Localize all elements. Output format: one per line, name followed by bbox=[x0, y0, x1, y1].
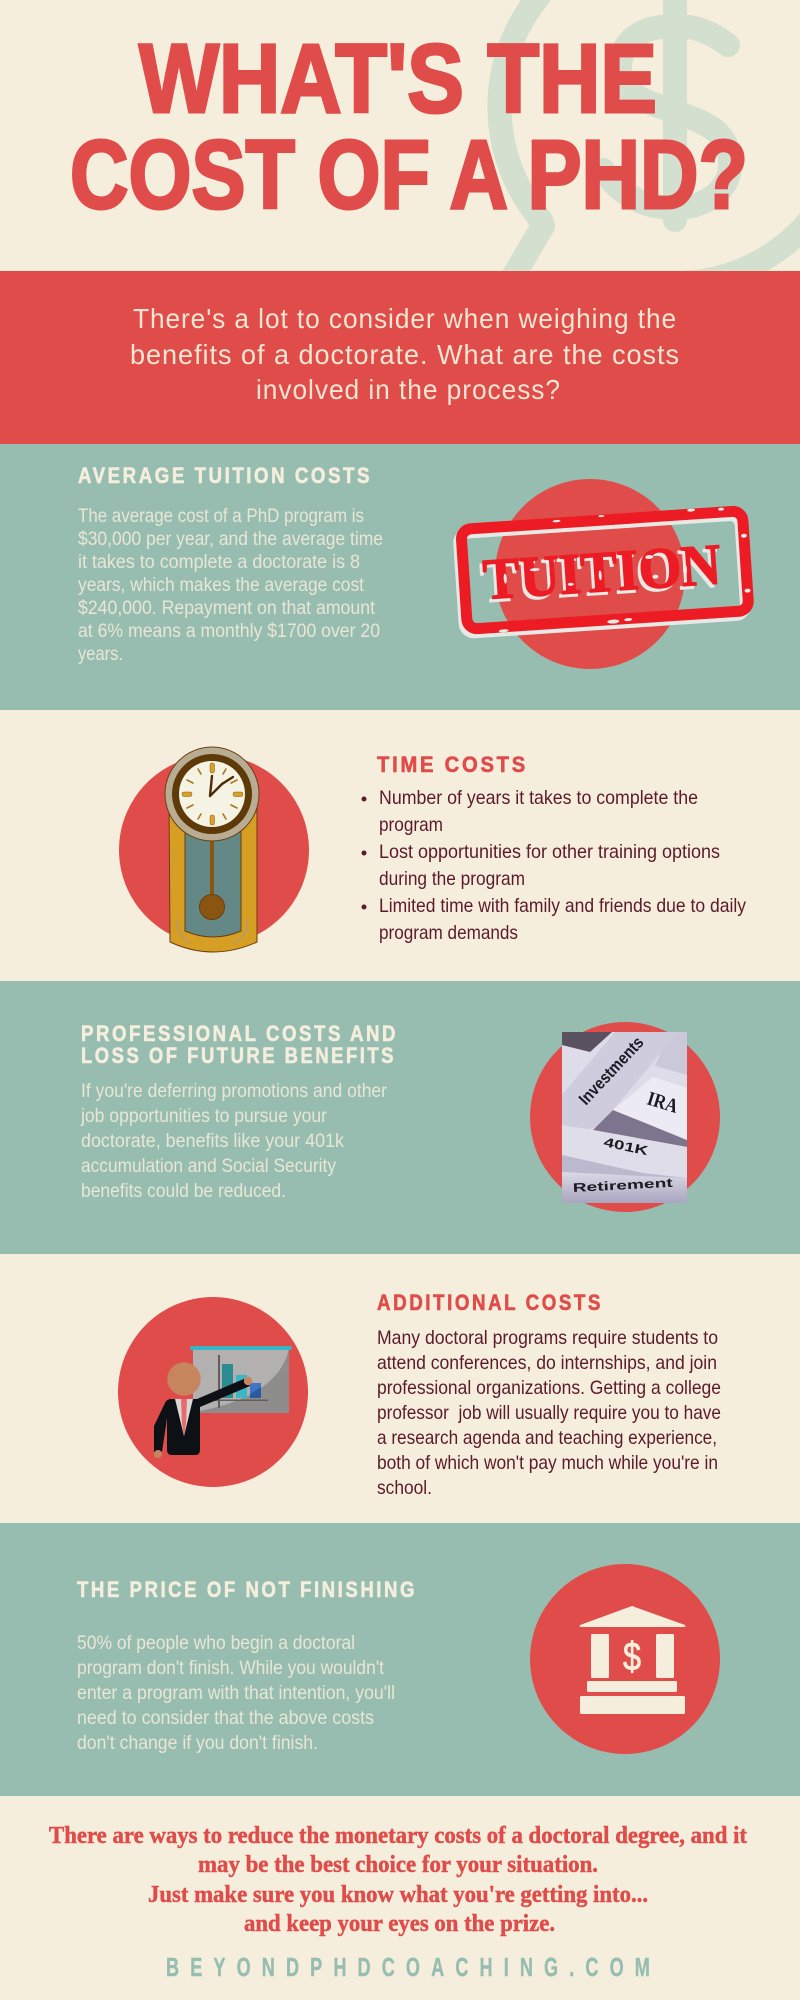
title bbox=[70, 24, 748, 229]
text: additional body: Many doctoral programs require students to bbox=[377, 1327, 718, 1349]
list: time costs bullets: Limited time with family and friends due to daily bbox=[379, 895, 746, 917]
panel: average tuition costs bbox=[0, 444, 800, 710]
text: not finishing body bbox=[77, 1633, 395, 1754]
text: closing statement: Just make sure you know what you're getting into... bbox=[148, 1882, 648, 1908]
text: professional body bbox=[80, 1081, 388, 1202]
panel: professional costs bbox=[0, 981, 800, 1254]
panel: intro banner: involved in the process? bbox=[256, 374, 561, 405]
panel: time costs bbox=[0, 710, 800, 981]
icon: tuition stamp on red circle bbox=[458, 479, 752, 669]
text: not finishing body: don't change if you don't finish. bbox=[77, 1733, 318, 1754]
text: professional body: benefits could be reduced. bbox=[81, 1181, 286, 1202]
list: time costs bullets: program demands bbox=[379, 922, 518, 944]
text: tuition body bbox=[78, 506, 383, 665]
text: closing statement: may be the best choice for your situation. bbox=[198, 1852, 598, 1878]
text: not finishing body: 50% of people who begin a doctoral bbox=[77, 1633, 355, 1654]
text: tuition body: years, which makes the average cost bbox=[78, 575, 365, 596]
list: time costs bullets: Lost opportunities for other training options bbox=[379, 841, 720, 863]
text: closing statement bbox=[49, 1823, 747, 1937]
heading: additional costs: ADDITIONAL COSTS bbox=[377, 1290, 603, 1315]
icon: retirement photo on red circle: Investments bbox=[575, 1033, 648, 1109]
panel: intro banner: There's a lot to consider when weighing the bbox=[133, 303, 677, 334]
text: professional body: accumulation and Social Security bbox=[81, 1156, 336, 1177]
text: professional body: doctorate, benefits like your 401k bbox=[81, 1131, 344, 1152]
text: tuition body: years. bbox=[78, 644, 123, 665]
icon: tuition stamp on red circle: TUITION bbox=[478, 535, 720, 615]
panel: intro banner: benefits of a doctorate. What are the costs bbox=[130, 339, 680, 370]
list: time costs bullets: during the program bbox=[379, 868, 525, 890]
icon: retirement photo on red circle: Retirement bbox=[572, 1176, 674, 1195]
text: tuition body: The average cost of a PhD program is bbox=[78, 506, 364, 527]
list: time costs bullets bbox=[362, 787, 746, 944]
icon: retirement photo on red circle: 401K bbox=[602, 1134, 650, 1158]
heading: professional costs: PROFESSIONAL COSTS AND bbox=[81, 1021, 398, 1046]
text: additional body: professor job will usually require you to have bbox=[377, 1402, 721, 1424]
icon: background dollar with circular arrow bbox=[499, 0, 800, 290]
icon: pendulum clock on red circle bbox=[119, 747, 309, 952]
icon: retirement photo on red circle bbox=[530, 1022, 720, 1212]
text: not finishing body: enter a program with that intention, you'll bbox=[77, 1683, 395, 1704]
panel: intro banner bbox=[0, 271, 800, 444]
panel: price of not finishing bbox=[0, 1523, 800, 1796]
text: professional body: job opportunities to pursue your bbox=[80, 1106, 328, 1127]
text: not finishing body: need to consider that the above costs bbox=[77, 1708, 374, 1729]
text: additional body bbox=[377, 1327, 721, 1499]
text: additional body: a research agenda and teaching experience, bbox=[377, 1427, 717, 1449]
text: tuition body: $240,000. Repayment on that amount bbox=[78, 598, 376, 619]
text: tuition body: $30,000 per year, and the average time bbox=[78, 529, 383, 550]
text: additional body: both of which won't pay much while you're in bbox=[377, 1452, 718, 1474]
icon: presenter on red circle bbox=[118, 1297, 308, 1487]
text: additional body: school. bbox=[377, 1477, 432, 1499]
panel: additional costs bbox=[0, 1254, 800, 1523]
heading: average tuition costs: AVERAGE TUITION COSTS bbox=[78, 463, 372, 488]
text: closing statement: There are ways to reduce the monetary costs of a doctoral degree, and it bbox=[49, 1823, 747, 1849]
panel: closing message bbox=[0, 1796, 800, 2000]
icon: tuition stamp on red circle: TUITION bbox=[481, 531, 723, 612]
text: tuition body: it takes to complete a doctorate is 8 bbox=[78, 552, 360, 573]
heading: professional costs bbox=[81, 1021, 398, 1068]
text: tuition body: at 6% means a monthly $1700 over 20 bbox=[78, 621, 380, 642]
heading: time costs: TIME COSTS bbox=[377, 752, 528, 777]
heading: professional costs: LOSS OF FUTURE BENEFITS bbox=[81, 1043, 396, 1068]
icon: bank on red circle bbox=[530, 1564, 720, 1754]
heading: price of not finishing: THE PRICE OF NOT FINISHING bbox=[77, 1577, 417, 1602]
text: additional body: professional organizations. Getting a college bbox=[377, 1377, 721, 1399]
text: professional body: If you're deferring promotions and other bbox=[81, 1081, 388, 1102]
list: time costs bullets: program bbox=[379, 814, 443, 836]
text: closing statement: and keep your eyes on the prize. bbox=[244, 1911, 555, 1937]
icon: retirement photo on red circle: IRA bbox=[645, 1088, 681, 1118]
text: not finishing body: program don't finish. While you wouldn't bbox=[77, 1658, 385, 1679]
icon: bank on red circle: $ bbox=[623, 1635, 641, 1679]
list: time costs bullets: Number of years it takes to complete the bbox=[379, 787, 698, 809]
title: WHAT'S THE bbox=[139, 24, 657, 133]
text: additional body: attend conferences, do internships, and join bbox=[377, 1352, 717, 1374]
